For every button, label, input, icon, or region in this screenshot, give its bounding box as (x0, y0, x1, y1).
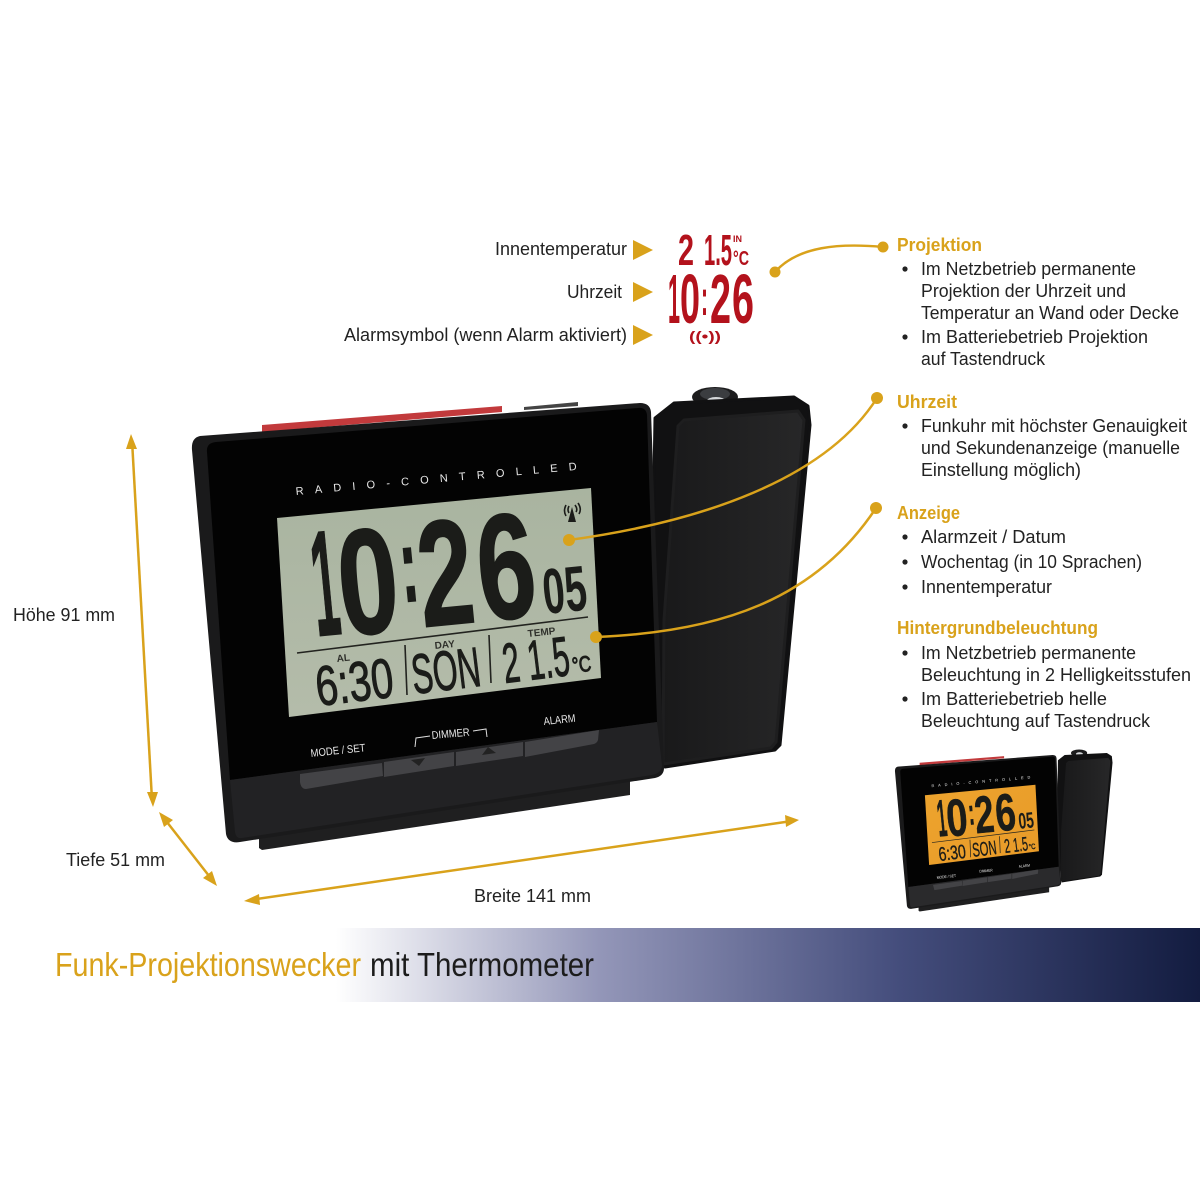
projected temperature: 1.5 (704, 226, 732, 275)
small device with illuminated display: 2 (972, 785, 997, 845)
text block: Anzeige: Anzeige (897, 503, 960, 523)
text block: Uhrzeit (897, 392, 1187, 480)
dimension: depth: Tiefe 51 mm (66, 850, 165, 870)
text block: Projektion: Projektion (897, 235, 982, 255)
text block: Projektion: Projektion der Uhrzeit und (921, 281, 1126, 301)
small device with illuminated display: 1 (934, 789, 949, 849)
title: subtitle: mit Thermometer (370, 946, 594, 983)
front panel (207, 408, 657, 780)
small device with illuminated display: 6 (993, 783, 1019, 843)
dimension: width: Breite 141 mm (474, 886, 591, 906)
label: Alarmsymbol: Alarmsymbol (wenn Alarm aktiviert) (344, 325, 627, 345)
alarm readout: 6:30 (312, 646, 397, 718)
text block: Anzeige (897, 503, 1142, 597)
alarm readout (312, 646, 397, 718)
button labels: ALARM (543, 713, 576, 728)
projected alarm symbol: ((•)) (689, 328, 721, 344)
text block: Hintergrundbeleuchtung: Im Netzbetrieb permanente (921, 643, 1136, 663)
button labels (310, 713, 576, 760)
text block: Projektion: Im Batteriebetrieb Projektion (921, 327, 1148, 347)
text block: Anzeige: Alarmzeit / Datum (921, 527, 1066, 547)
small device with illuminated display: : (966, 791, 976, 833)
title band (0, 928, 1200, 1002)
small device with illuminated display: 2 1.5 (1003, 833, 1029, 858)
text block: Anzeige: Innentemperatur (921, 577, 1052, 597)
text block: Hintergrundbeleuchtung: Beleuchtung in 2 Helligkeitsstufen (921, 665, 1191, 685)
text block: Hintergrundbeleuchtung (897, 618, 1191, 731)
button labels: MODE / SET (310, 742, 366, 760)
callout: Uhrzeit (563, 392, 883, 546)
text block: Hintergrundbeleuchtung: Beleuchtung auf Tastendruck (921, 711, 1151, 731)
label: Uhrzeit (567, 282, 653, 302)
alarm readout: AL (336, 653, 351, 665)
temperature readout: °C (571, 651, 593, 678)
clock device (192, 387, 810, 850)
brand text: RADIO-CONTROLLED (295, 461, 577, 498)
projector arm (652, 387, 810, 767)
text block: Projektion (897, 235, 1179, 369)
text block: Hintergrundbeleuchtung: Hintergrundbeleuchtung (897, 618, 1098, 638)
red snooze bar (262, 406, 502, 432)
text block: Uhrzeit: Einstellung möglich) (921, 460, 1081, 480)
projected temperature: IN (733, 234, 742, 244)
title: product name: Funk-Projektionswecker (55, 946, 361, 983)
callout: Anzeige (590, 502, 882, 643)
day readout (408, 635, 484, 706)
text block: Hintergrundbeleuchtung: Im Batteriebetrieb helle (921, 689, 1107, 709)
day readout: DAY (434, 639, 456, 652)
time digits: : (394, 507, 423, 625)
projected time: 6 (732, 260, 754, 338)
time digits: 2 (410, 486, 481, 659)
small device with illuminated display: RADIO-CONTROLLED (931, 775, 1031, 788)
text block: Projektion: Im Netzbetrieb permanente (921, 259, 1136, 279)
projected display (668, 226, 754, 344)
small device with illuminated display: DIMMER (979, 868, 993, 874)
text block: Uhrzeit: Uhrzeit (897, 392, 957, 412)
LCD screen (277, 480, 601, 718)
small device with illuminated display: 0 (944, 788, 970, 849)
label: Uhrzeit: Uhrzeit (567, 282, 622, 302)
time digits (304, 480, 543, 668)
projected temperature: 2 (678, 226, 694, 275)
text block: Uhrzeit: und Sekundenanzeige (manuelle (921, 438, 1180, 458)
antenna icon (564, 503, 580, 522)
projected time: 0 (680, 260, 700, 338)
temperature readout (499, 624, 593, 695)
temperature readout: 2 1.5 (499, 624, 573, 695)
text block: Anzeige: Wochentag (in 10 Sprachen) (921, 552, 1142, 572)
small device with illuminated display (895, 749, 1113, 912)
text block: Projektion: Temperatur an Wand oder Decke (921, 303, 1179, 323)
callout: Projektion (770, 242, 888, 278)
projected temperature: °C (733, 248, 749, 270)
button labels: DIMMER (431, 727, 470, 742)
temperature readout: TEMP (527, 626, 556, 640)
projected temperature (678, 226, 749, 275)
small device with illuminated display: MODE / SET (937, 874, 957, 880)
small device with illuminated display: 6:30 (937, 841, 967, 866)
dimension: depth (66, 812, 217, 886)
small device with illuminated display: 05 (1017, 807, 1035, 834)
projected time: 2 (710, 260, 731, 338)
dimension: height: Höhe 91 mm (13, 605, 115, 625)
text block: Uhrzeit: Funkuhr mit höchster Genauigkeit (921, 416, 1187, 436)
time digits: 0 (330, 495, 406, 668)
dimension: width (244, 815, 799, 906)
projected time: 1 (668, 260, 680, 338)
time digits: 1 (304, 498, 346, 668)
dimension: height (13, 434, 158, 807)
projected time (668, 260, 754, 338)
small device with illuminated display: °C (1028, 842, 1036, 852)
foot (259, 770, 630, 850)
time digits: 6 (469, 480, 543, 653)
lower strip (230, 722, 662, 838)
text block: Projektion: auf Tastendruck (921, 349, 1046, 369)
buttons (300, 730, 599, 789)
small device with illuminated display: SON (971, 837, 998, 862)
seconds: 05 (539, 552, 590, 628)
divider (297, 617, 588, 695)
housing (192, 403, 664, 842)
projected time: : (701, 270, 708, 326)
label: Innentemperatur: Innentemperatur (495, 239, 627, 259)
small device with illuminated display: ALARM (1019, 864, 1030, 869)
day readout: SON (408, 635, 484, 706)
